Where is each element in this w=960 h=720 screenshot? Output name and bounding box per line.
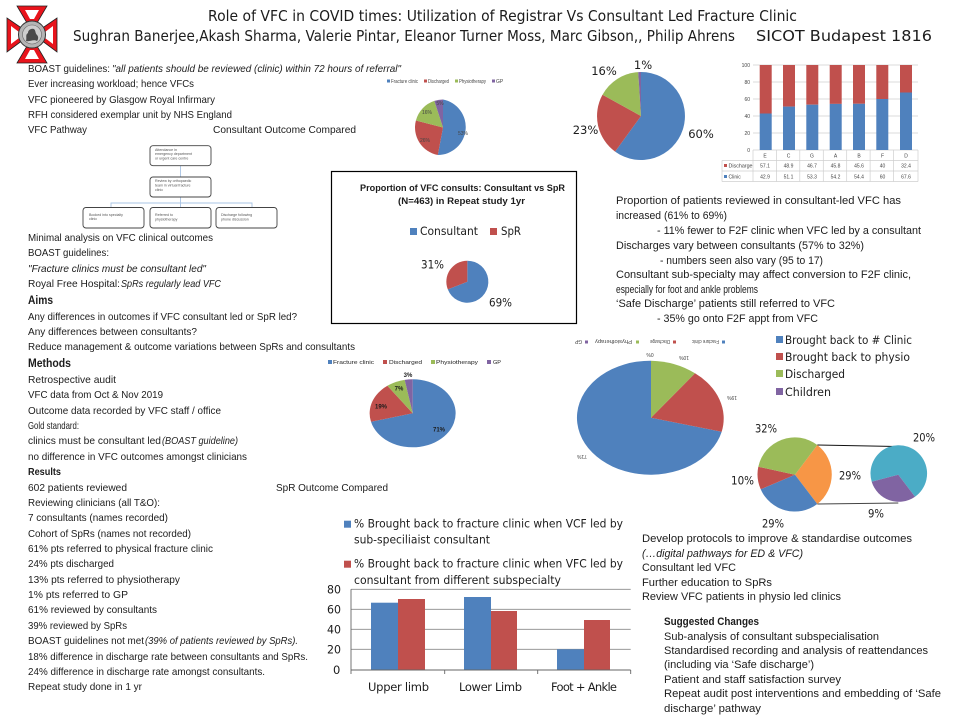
stacked bar chart: outcomes by consultant: B — [857, 154, 861, 160]
text block: repeat study findings: Consultant sub-specialty may affect conversion to F2F clinic, — [616, 269, 911, 281]
pie chart: repeat study consultant outcomes: 16% — [591, 64, 617, 78]
text block: aims — [28, 293, 355, 353]
stacked bar chart: outcomes by consultant: 45.8 — [831, 164, 841, 170]
text block: suggested changes: Sub-analysis of consultant subspecialisation — [664, 631, 879, 643]
stacked bar chart: outcomes by consultant: Discharge — [728, 164, 753, 170]
stacked bar chart: outcomes by consultant: 42.9 — [760, 174, 770, 180]
stacked bar chart: outcomes by consultant: 60 — [880, 174, 885, 180]
text block: recommendations: Review VFC patients in physio led clinics — [642, 591, 841, 603]
pie chart: consultant outcomes: Physiotherapy — [459, 79, 486, 85]
icon: society cross logo — [7, 6, 57, 63]
text block: recommendations — [642, 533, 913, 603]
text block: methods: Gold standard: — [28, 420, 79, 432]
stacked bar chart: outcomes by consultant: 53.3 — [807, 174, 817, 180]
pie chart: SpR outcomes: 7% — [395, 386, 404, 392]
stacked bar chart: outcomes by consultant: 40 — [880, 164, 885, 170]
panel: proportion of VFC consults: 31% — [421, 258, 444, 272]
text block: results: 24% pts discharged — [28, 558, 114, 570]
stacked bar chart: outcomes by consultant — [722, 63, 918, 182]
stacked bar chart: outcomes by consultant: G — [810, 154, 814, 160]
text block: results: 61% reviewed by consultants — [28, 604, 157, 616]
flowchart: VFC pathway: Attendance in — [155, 148, 177, 152]
panel: proportion of VFC consults: Proportion of VFC consults: Consultant vs SpR — [360, 183, 565, 194]
text block: background: Ever increasing workload; hence VFCs — [28, 78, 194, 90]
stacked bar chart: outcomes by consultant: 45.6 — [854, 164, 864, 170]
pie chart: repeat study consultant outcomes: 1% — [634, 58, 652, 72]
legend: outcome categories: Children — [785, 385, 831, 399]
pie of pie chart: patient outcomes: 20% — [913, 430, 935, 444]
text block: background: "all patients should be reviewed (clinic) within 72 hours of referral" — [112, 63, 402, 75]
pie chart: inverted SpR outcomes: Fracture clinic — [692, 338, 719, 344]
text block: repeat study findings: ‘Safe Discharge’ patients still referred to VFC — [616, 298, 835, 310]
text block: methods: clinics must be consultant led — [28, 435, 161, 447]
flowchart: VFC pathway: Discharge following — [221, 213, 252, 217]
stacked bar chart: outcomes by consultant: 20 — [744, 131, 750, 137]
title: Role of VFC in COVID times: Utilization of Registrar Vs Consultant Led Fracture Clinic — [208, 7, 797, 25]
pie of pie chart: patient outcomes: 29% — [762, 516, 784, 530]
text block: repeat study findings: - 35% go onto F2F appt from VFC — [657, 313, 818, 325]
text block: background: RFH considered exemplar unit by NHS England — [28, 109, 232, 121]
text block: results: 7 consultants (names recorded) — [28, 512, 168, 524]
heading: SpR outcome compared: SpR Outcome Compared — [276, 482, 388, 494]
pie of pie chart: patient outcomes: 32% — [755, 422, 777, 436]
stacked bar chart: outcomes by consultant: 100 — [742, 63, 750, 69]
stacked bar chart: outcomes by consultant: 54.4 — [854, 174, 864, 180]
flowchart: VFC pathway: or urgent care centre — [155, 156, 188, 160]
stacked bar chart: outcomes by consultant: 67.6 — [901, 174, 911, 180]
stacked bar chart: outcomes by consultant: 80 — [744, 80, 750, 86]
panel: proportion of VFC consults: (N=463) in Repeat study 1yr — [398, 196, 525, 207]
text block: repeat study findings: Proportion of patients reviewed in consultant-led VFC has — [616, 195, 902, 207]
bar chart: brought back to fracture clinic by subspecialty: 0 — [333, 663, 340, 677]
pie chart: SpR outcomes: 71% — [433, 428, 446, 434]
pie chart: SpR outcomes: Physiotherapy — [436, 360, 478, 366]
panel: proportion of VFC consults: SpR — [501, 224, 521, 238]
legend: outcome categories — [776, 333, 912, 399]
stacked bar chart: outcomes by consultant: A — [834, 154, 838, 160]
stacked bar chart: outcomes by consultant: 57.1 — [760, 164, 770, 170]
text block: aims: Any differences between consultants? — [28, 326, 197, 338]
text block: methods: no difference in VFC outcomes amongst clinicians — [28, 451, 247, 463]
text block: clinical outcome gap: Minimal analysis on VFC clinical outcomes — [28, 232, 213, 244]
text block: suggested changes — [664, 616, 941, 715]
flowchart: VFC pathway: physiotherapy — [155, 218, 178, 222]
text block: repeat study findings — [616, 195, 921, 325]
text block: methods — [28, 356, 247, 463]
pie chart: inverted SpR outcomes: 0% — [646, 351, 654, 357]
bar chart: brought back to fracture clinic by subspecialty: 40 — [327, 622, 341, 636]
text block: methods: (BOAST guideline) — [162, 435, 238, 447]
flowchart: VFC pathway: clinic — [89, 217, 97, 221]
stacked bar chart: outcomes by consultant: 51.1 — [784, 174, 794, 180]
flowchart: VFC pathway: phone discussion — [221, 218, 249, 222]
text block: results: 18% difference in discharge rate between consultants and SpRs. — [28, 651, 308, 663]
text block: results: Repeat study done in 1 yr — [28, 681, 142, 693]
pie of pie chart: patient outcomes: 29% — [839, 468, 861, 482]
pie chart: inverted SpR outcomes — [574, 338, 737, 475]
bar chart: brought back to fracture clinic by subspecialty: 60 — [327, 602, 341, 616]
text block: repeat study findings: - 11% fewer to F2F clinic when VFC led by a consultant — [657, 225, 921, 237]
text block: suggested changes: Repeat audit post interventions and embedding of ‘Safe — [664, 688, 941, 700]
stacked bar chart: outcomes by consultant: E — [763, 154, 767, 160]
pie chart: inverted SpR outcomes: 71% — [576, 453, 587, 459]
text block: results: 39% reviewed by SpRs — [28, 620, 127, 632]
legend: outcome categories: Brought back to physio — [785, 350, 910, 364]
text block: methods: Methods — [28, 356, 71, 370]
text block: recommendations: (…digital pathways for ED & VFC) — [642, 548, 803, 560]
pie chart: consultant outcomes: 53% — [458, 131, 469, 137]
text block: repeat study findings: - numbers seen also vary (95 to 17) — [660, 255, 823, 267]
pie chart: inverted SpR outcomes: Discharge — [650, 338, 670, 344]
text block: results: BOAST guidelines not met — [28, 635, 144, 647]
title — [73, 7, 932, 45]
text block: results: 1% pts referred to GP — [28, 589, 128, 601]
text block: results: 61% pts referred to physical fracture clinic — [28, 543, 213, 555]
stacked bar chart: outcomes by consultant: 46.7 — [807, 164, 817, 170]
pie chart: SpR outcomes: GP — [493, 360, 501, 366]
pie chart: consultant outcomes: 5% — [436, 101, 444, 107]
text block: clinical outcome gap — [28, 232, 221, 290]
pie of pie chart: patient outcomes: 9% — [868, 506, 884, 520]
bar chart: brought back to fracture clinic by subspecialty: Foot + Ankle — [551, 680, 617, 694]
pie chart: inverted SpR outcomes: 19% — [726, 394, 737, 400]
text block: suggested changes: discharge’ pathway — [664, 703, 762, 715]
bar chart: brought back to fracture clinic by subspecialty: Lower Limb — [459, 680, 522, 694]
bar chart: brought back to fracture clinic by subspecialty: consultant from different subspecialty — [354, 573, 561, 587]
pie chart: consultant outcomes: Discharged — [428, 79, 449, 85]
text block: results: 602 patients reviewed — [28, 482, 127, 494]
text block: results: Results — [28, 466, 61, 478]
flowchart: VFC pathway: team in virtual fracture — [155, 184, 191, 188]
pie chart: SpR outcomes — [328, 360, 501, 447]
flowchart: VFC pathway: clinic — [155, 188, 163, 192]
text block: background: BOAST guidelines: — [28, 63, 110, 75]
pie chart: repeat study consultant outcomes: 23% — [573, 123, 598, 137]
bar chart: brought back to fracture clinic by subspecialty: % Brought back to fracture clinic when VFC led by — [354, 557, 623, 571]
text block: suggested changes: (including via ‘Safe discharge’) — [664, 659, 814, 671]
text block: results — [28, 466, 308, 693]
pie chart: SpR outcomes: Discharged — [389, 360, 422, 366]
flowchart: VFC pathway: Referred to — [155, 213, 173, 217]
bar chart: brought back to fracture clinic by subspecialty: sub-speciliaist consultant — [354, 533, 490, 547]
stacked bar chart: outcomes by consultant: 48.9 — [784, 164, 794, 170]
stacked bar chart: outcomes by consultant: 60 — [744, 97, 750, 103]
stacked bar chart: outcomes by consultant: Clinic — [728, 174, 741, 180]
bar chart: brought back to fracture clinic by subspecialty — [327, 517, 631, 694]
panel: proportion of VFC consults: 69% — [489, 296, 512, 310]
text block: clinical outcome gap: "Fracture clinics must be consultant led" — [28, 263, 207, 275]
pie chart: repeat study consultant outcomes: 60% — [688, 127, 714, 141]
text block: methods: Retrospective audit — [28, 374, 116, 386]
pie chart: inverted SpR outcomes: 10% — [678, 354, 689, 360]
bar chart: brought back to fracture clinic by subspecialty: % Brought back to fracture clinic when VCF led by — [354, 517, 623, 531]
text block: suggested changes: Patient and staff satisfaction survey — [664, 674, 842, 686]
text block: results: 24% difference in discharge rate amongst consultants. — [28, 666, 265, 678]
panel: proportion of VFC consults — [332, 172, 576, 324]
panel: proportion of VFC consults: Consultant — [420, 224, 478, 238]
text block: aims: Reduce management & outcome variations between SpRs and consultants — [28, 341, 355, 353]
text block: clinical outcome gap: SpRs regularly lead VFC — [121, 278, 221, 290]
title: SICOT Budapest 1816 — [756, 27, 932, 45]
text block: results: Reviewing clinicians (all T&O): — [28, 497, 160, 509]
heading: consultant outcome compared: Consultant Outcome Compared — [213, 124, 356, 136]
stacked bar chart: outcomes by consultant: 32.4 — [901, 164, 911, 170]
pie of pie chart: patient outcomes: 10% — [731, 474, 754, 488]
bar chart: brought back to fracture clinic by subspecialty: Upper limb — [368, 680, 429, 694]
flowchart: VFC pathway: Review by orthopaedic — [155, 179, 192, 183]
legend: outcome categories: Discharged — [785, 367, 845, 381]
stacked bar chart: outcomes by consultant: D — [904, 154, 908, 160]
text block: recommendations: Develop protocols to improve & standardise outcomes — [642, 533, 913, 545]
stacked bar chart: outcomes by consultant: F — [881, 154, 884, 160]
text block: methods: VFC data from Oct & Nov 2019 — [28, 389, 163, 401]
text block: clinical outcome gap: Royal Free Hospital: — [28, 278, 120, 290]
text block: background: VFC Pathway — [28, 124, 88, 136]
text block: clinical outcome gap: BOAST guidelines: — [28, 247, 109, 259]
stacked bar chart: outcomes by consultant: 54.2 — [831, 174, 841, 180]
flowchart: VFC pathway: emergency department — [155, 152, 192, 156]
text block: results: Cohort of SpRs (names not recorded) — [28, 528, 191, 540]
pie of pie chart: patient outcomes — [731, 422, 935, 530]
pie chart: SpR outcomes: 19% — [375, 404, 388, 410]
text block: repeat study findings: especially for foot and ankle problems — [616, 284, 758, 296]
text block: results: 13% pts referred to physiotherapy — [28, 574, 181, 586]
text block: background: VFC pioneered by Glasgow Royal Infirmary — [28, 94, 216, 106]
pie chart: SpR outcomes: 3% — [404, 373, 413, 379]
pie chart: SpR outcomes: Fracture clinic — [333, 360, 374, 366]
flowchart: VFC pathway: Booked into specialty — [89, 213, 123, 217]
text block: background — [28, 63, 402, 136]
stacked bar chart: outcomes by consultant: C — [787, 154, 791, 160]
pie chart: repeat study consultant outcomes — [573, 58, 714, 160]
pie chart: consultant outcomes: Fracture clinic — [391, 79, 418, 85]
bar chart: brought back to fracture clinic by subspecialty: 80 — [327, 582, 341, 596]
text block: suggested changes: Suggested Changes — [664, 616, 759, 628]
legend: outcome categories: Brought back to # Clinic — [785, 333, 912, 347]
title: Sughran Banerjee,Akash Sharma, Valerie Pintar, Eleanor Turner Moss, Marc Gibson,, Philip Ahrens — [73, 27, 735, 45]
stacked bar chart: outcomes by consultant: 0 — [747, 148, 750, 154]
text block: repeat study findings: increased (61% to 69%) — [616, 210, 727, 222]
text block: aims: Aims — [28, 293, 53, 307]
text block: repeat study findings: Discharges vary between consultants (57% to 32%) — [616, 240, 864, 252]
text block: aims: Any differences in outcomes if VFC consultant led or SpR led? — [28, 311, 297, 323]
bar chart: brought back to fracture clinic by subspecialty: 20 — [327, 642, 341, 656]
text block: recommendations: Consultant led VFC — [642, 562, 736, 574]
text block: suggested changes: Standardised recording and analysis of reattendances — [664, 645, 928, 657]
text block: recommendations: Further education to SpRs — [642, 577, 773, 589]
pie chart: consultant outcomes: 26% — [420, 138, 431, 144]
stacked bar chart: outcomes by consultant: 40 — [744, 114, 750, 120]
pie chart: consultant outcomes: 16% — [422, 110, 433, 116]
text block: results: (39% of patients reviewed by SpRs). — [145, 635, 298, 647]
pie chart: inverted SpR outcomes: Physiotherapy — [594, 338, 632, 344]
text block: methods: Outcome data recorded by VFC staff / office — [28, 405, 221, 417]
pie chart: inverted SpR outcomes: GP — [574, 338, 582, 344]
flowchart: VFC pathway — [83, 146, 277, 228]
pie chart: consultant outcomes — [387, 79, 504, 155]
pie chart: consultant outcomes: GP — [496, 79, 504, 85]
